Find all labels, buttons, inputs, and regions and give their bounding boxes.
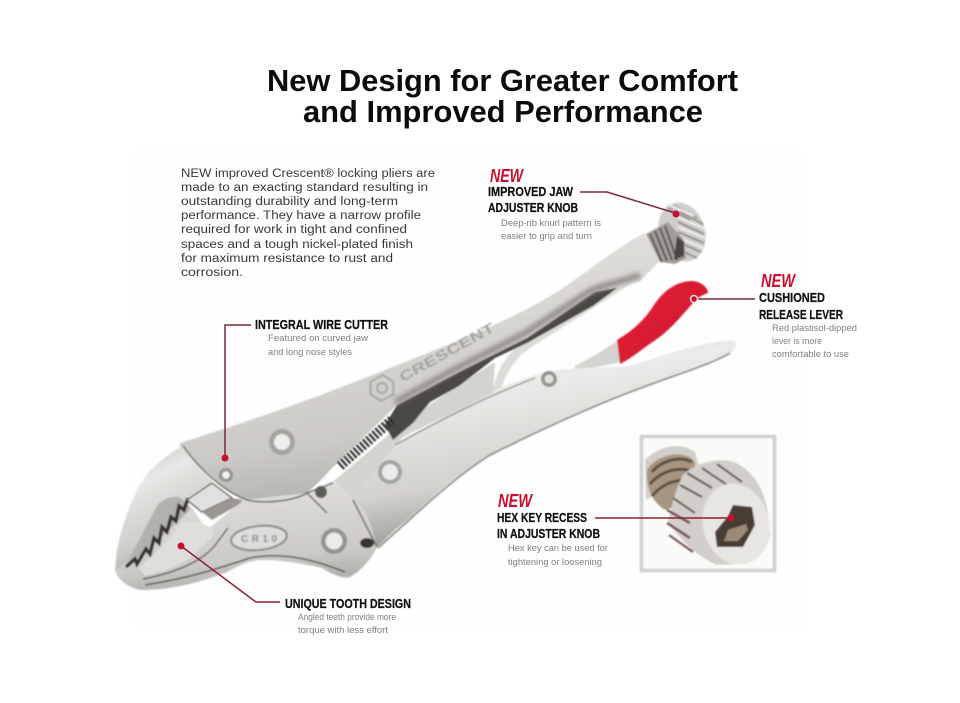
adjuster screw thread	[646, 222, 686, 264]
leader dot	[222, 454, 228, 462]
callout description	[501, 218, 601, 242]
thread grooves and recess	[650, 226, 677, 262]
jaw contour lines	[143, 446, 377, 579]
leader line	[697, 298, 755, 300]
leader dot	[728, 514, 734, 522]
jaw link bars	[187, 483, 232, 512]
rivets	[219, 371, 557, 554]
callout heading: IMPROVED JAW	[488, 184, 574, 199]
callout heading: HEX KEY RECESS	[497, 510, 587, 525]
stamped oval: CR10	[241, 534, 277, 545]
jaw teeth	[126, 498, 188, 567]
callout: integral wire cutter	[222, 317, 389, 462]
title	[267, 63, 738, 129]
callout description: tightening or loosening	[508, 557, 602, 568]
callout description: torque with less effort	[298, 625, 388, 636]
callout description	[298, 612, 396, 636]
lower jaw contour	[145, 556, 345, 585]
title: and Improved Performance	[303, 94, 703, 129]
callout description: Deep-rib knurl pattern is	[501, 218, 601, 229]
intro text block	[181, 168, 435, 279]
lower jaw and arm	[115, 480, 377, 590]
upper handle with brand	[180, 233, 660, 502]
leader line	[595, 517, 729, 519]
intro text block: spaces and a tough nickel-plated finish	[181, 239, 413, 251]
callout description: easier to grip and turn	[501, 231, 592, 242]
spring	[340, 419, 393, 466]
callout description: comfortable to use	[772, 349, 849, 360]
lower jaw insert	[138, 522, 213, 576]
title: New Design for Greater Comfort	[267, 63, 738, 98]
callout description: Red plastisol-dipped	[772, 323, 857, 334]
detail: red knob ribs	[667, 510, 693, 552]
detail: hex socket	[715, 505, 755, 547]
intro text block: for maximum resistance to rust and	[181, 253, 393, 265]
knob recess	[674, 236, 684, 260]
brand mark	[365, 317, 499, 404]
callout heading: UNIQUE TOOTH DESIGN	[285, 596, 411, 611]
callout description	[508, 543, 608, 568]
hex recess detail photo	[642, 436, 778, 572]
callout description	[268, 333, 368, 358]
detail: knob ribs	[673, 464, 742, 513]
locking pliers illustration	[115, 196, 736, 590]
detail: thread cap	[645, 446, 700, 500]
callout heading: INTEGRAL WIRE CUTTER	[255, 317, 389, 332]
detail: socket highlight	[724, 524, 748, 541]
upper jaw	[115, 446, 213, 570]
arm contour line	[395, 378, 535, 445]
callout heading	[759, 290, 843, 322]
callout: cushioned release lever	[690, 271, 857, 360]
red release lever	[575, 281, 708, 370]
detail: thread	[647, 454, 695, 510]
callout heading: IN ADJUSTER KNOB	[497, 526, 600, 541]
intro text block: made to an exacting standard resulting in	[181, 182, 428, 194]
leader line	[225, 325, 251, 458]
new tag: NEW	[761, 271, 797, 291]
stamped oval	[230, 523, 288, 553]
leader ring	[690, 296, 698, 302]
callout heading: ADJUSTER KNOB	[488, 200, 578, 215]
callout heading	[488, 184, 578, 215]
background panel	[130, 145, 810, 635]
callout description: Hex key can be used for	[508, 543, 608, 554]
callout heading: CUSHIONED	[759, 290, 825, 305]
brand mark: CRESCENT	[396, 319, 497, 385]
lower handle shadow edge	[378, 353, 730, 548]
intro text block: required for work in tight and confined	[181, 224, 407, 236]
leader dot	[672, 210, 680, 218]
new tag: NEW	[498, 491, 534, 511]
detail: thread grooves	[650, 459, 694, 496]
new tag: NEW	[490, 166, 525, 186]
lower handle	[345, 340, 736, 552]
callout description: Featured on curved jaw	[268, 333, 368, 344]
intro text block: outstanding durability and long-term	[181, 196, 398, 208]
upper handle underside shading	[395, 275, 640, 402]
second jaw link	[202, 498, 243, 520]
callout heading: RELEASE LEVER	[759, 307, 843, 322]
leader line	[181, 546, 280, 602]
release lever silver strip	[493, 278, 634, 392]
callout: unique tooth design	[178, 542, 411, 636]
intro text block: NEW improved Crescent® locking pliers are	[181, 168, 435, 180]
leader line	[580, 192, 675, 213]
callout: improved jaw adjuster knob	[488, 166, 680, 242]
detail: knob body	[668, 460, 770, 565]
callout description: and long nose styles	[268, 347, 352, 358]
detail: knob face	[694, 476, 778, 572]
jaw teeth band	[125, 497, 190, 567]
jaw adjuster knob	[651, 196, 713, 268]
callout: hex key recess	[497, 491, 734, 568]
callout heading	[497, 510, 600, 541]
intro text block: corrosion.	[181, 267, 243, 279]
leader dot	[178, 542, 184, 550]
callout description	[772, 323, 857, 360]
intro text block: performance. They have a narrow profile	[181, 210, 421, 222]
callout description: lever is more	[772, 336, 822, 347]
lower arm filler	[335, 362, 495, 500]
dark channel	[385, 280, 628, 440]
callout description: Angled teeth provide more	[298, 612, 396, 623]
